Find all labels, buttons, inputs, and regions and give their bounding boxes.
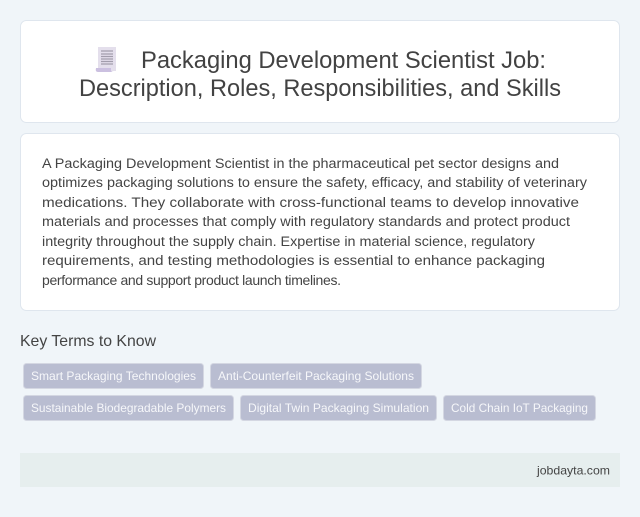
tag: anti-counterfeit: Anti-Counterfeit Packaging Solutions xyxy=(218,369,414,383)
description paragraph xyxy=(42,156,588,288)
tag: digital twin xyxy=(240,396,436,420)
tag: anti-counterfeit xyxy=(210,364,422,388)
panel: description xyxy=(20,134,620,310)
tag: cold chain: Cold Chain IoT Packaging xyxy=(451,401,588,415)
tag: biodegradable polymers: Sustainable Biodegradable Polymers xyxy=(31,401,226,415)
tag: digital twin: Digital Twin Packaging Simulation xyxy=(248,401,429,415)
footer xyxy=(20,453,620,487)
footer: jobdayta.com xyxy=(536,464,610,478)
description paragraph: medications. They collaborate with cross-functional teams to develop innovative xyxy=(42,195,579,211)
description paragraph: materials and processes that comply with regulatory standards and protect product xyxy=(42,214,570,230)
description paragraph: requirements, and testing methodologies is essential to enhance packaging xyxy=(42,253,545,269)
heading line 1: Packaging Development Scientist Job: xyxy=(141,48,546,74)
description paragraph: A Packaging Development Scientist in the pharmaceutical pet sector designs and xyxy=(42,156,559,172)
tag: smart packaging: Smart Packaging Technologies xyxy=(31,369,196,383)
tag: cold chain xyxy=(444,396,596,420)
panel: title xyxy=(20,20,620,122)
description paragraph: performance and support product launch timelines. xyxy=(42,272,341,288)
icon: document scroll xyxy=(96,47,116,72)
key terms heading: Key Terms to Know xyxy=(20,333,156,350)
tag: biodegradable polymers xyxy=(24,396,234,420)
heading line 2: Description, Roles, Responsibilities, and Skills xyxy=(79,76,561,102)
tag: smart packaging xyxy=(24,364,204,388)
description paragraph: optimizes packaging solutions to ensure the safety, efficacy, and stability of veterinary xyxy=(42,175,588,191)
description paragraph: integrity throughout the supply chain. Expertise in material science, regulatory xyxy=(42,234,536,250)
